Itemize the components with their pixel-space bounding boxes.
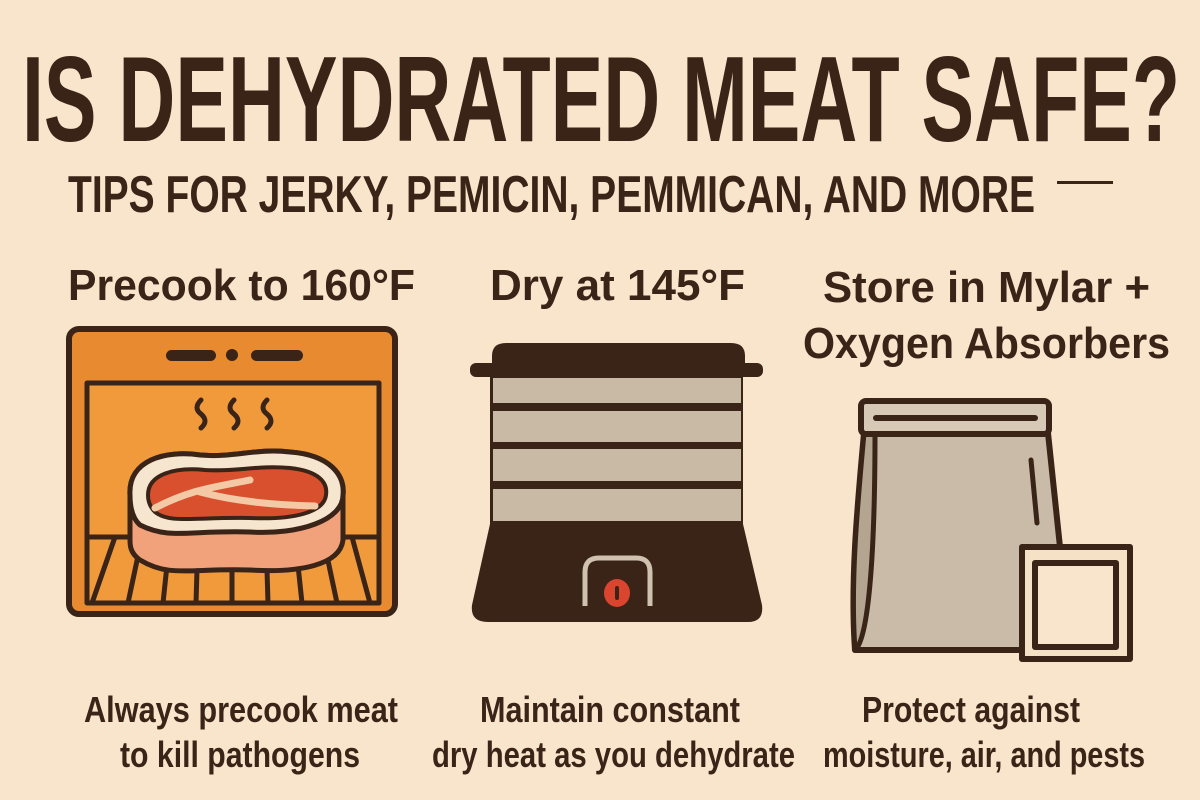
icon: mylar bag with oxygen absorber <box>853 401 1130 659</box>
caption: store: Protect against <box>862 689 1080 730</box>
caption: dry: Maintain constant <box>480 689 740 730</box>
heading: store: Store in Mylar + <box>823 263 1150 312</box>
caption: dry <box>432 689 795 775</box>
icon: oven with steak <box>69 329 395 614</box>
caption: store <box>823 689 1145 775</box>
caption: precook: to kill pathogens <box>120 734 360 775</box>
caption: precook: Always precook meat <box>84 689 398 730</box>
heading: store: Oxygen Absorbers <box>803 319 1170 368</box>
icon: dehydrator <box>470 343 763 622</box>
heading: store <box>803 263 1170 368</box>
caption: precook <box>84 689 398 775</box>
caption: dry: dry heat as you dehydrate <box>432 734 795 775</box>
heading: dry: Dry at 145°F <box>490 261 745 310</box>
heading: precook: Precook to 160°F <box>68 261 415 310</box>
